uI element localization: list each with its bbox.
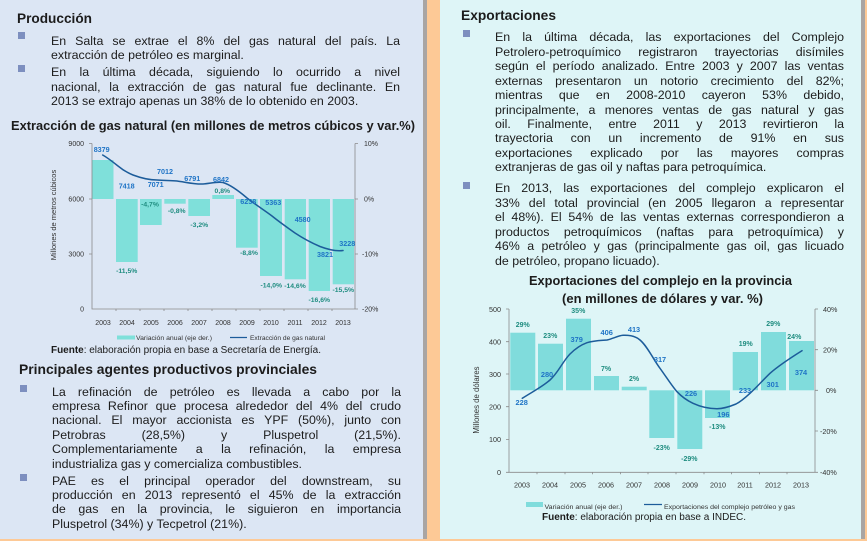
year labels: 2004 (119, 320, 135, 327)
heading: chart subtitle exports: (en millones de dólares y var. %) (562, 291, 763, 306)
value labels: 317 (654, 355, 666, 364)
percent labels: 35% (571, 308, 586, 315)
axes (506, 309, 818, 474)
text: PAE: Pluspetrol (34%) y Tecpetrol (21%). (52, 517, 247, 531)
right axis labels: -20% (820, 427, 837, 436)
year labels: 2013 (793, 480, 809, 490)
bullet icon (20, 385, 27, 392)
bars: annual variation (92, 160, 354, 291)
left axis labels: 300 (489, 370, 501, 379)
legend: Extracción de gas natural (250, 335, 325, 342)
text: exports decade: En la última década, las exportaciones del Complejo (495, 30, 844, 44)
text: exports decade: mientras que en 2008-2010 cayeron 53% debido, (495, 88, 844, 102)
legend: Variación anual (eje der.) (544, 504, 622, 511)
text: refining: Petrobras (28,5%) y Pluspetrol (21,5%). (52, 428, 401, 442)
panel: right edge shadow (861, 0, 865, 539)
text: last decade (51, 65, 400, 108)
value labels: 3228 (339, 239, 355, 248)
value labels: 228 (516, 398, 528, 407)
bullet icon (18, 65, 25, 72)
line: gas extraction (103, 155, 343, 251)
text: PAE: de gas en la provincia, le siguieron en importancia (52, 502, 401, 516)
legend: Variación anual (eje der.) (136, 335, 212, 342)
value labels (94, 145, 355, 259)
left axis labels: 3000 (68, 252, 84, 258)
text: exports decade: externas presentaron un notorio crecimiento del 82%; (495, 74, 844, 88)
year labels (514, 480, 809, 490)
percent labels: -13% (709, 424, 726, 431)
year labels: 2013 (335, 320, 351, 327)
axis title: Millones de metros cúbicos (49, 170, 58, 260)
text: exports 2013: 33% del total provincial (en 2005 llegaron a representar (495, 196, 844, 210)
heading: Principales agentes: Principales agentes productivos provinciales (19, 361, 317, 377)
percent labels: -23% (654, 445, 671, 452)
year labels: 2011 (737, 480, 753, 490)
left axis labels: 6000 (68, 196, 84, 204)
left axis labels: 500 (489, 305, 501, 314)
year labels: 2004 (542, 480, 558, 490)
heading: chart title exports: Exportaciones del complejo en la provincia (529, 273, 793, 288)
year labels: 2003 (514, 480, 530, 490)
value labels: 4580 (295, 215, 311, 224)
left axis labels: 400 (489, 338, 501, 346)
year labels: 2011 (287, 320, 303, 327)
text: exports decade: Petrolero-petroquímico registraron trayectorias disímiles (495, 45, 844, 59)
text: gas share: En Salta se extrae el 8% del gas natural del país. La (51, 34, 400, 48)
text: exports 2013 (495, 181, 844, 268)
value labels: 406 (601, 328, 613, 337)
right axis labels (820, 305, 838, 477)
text: exports 2013: el 48%). El 54% de las ventas externas correspondieron a (495, 210, 844, 224)
right axis labels: 0% (826, 386, 837, 395)
year labels (95, 320, 351, 327)
text: exports decade: según el período analizado. Entre 2003 y 2007 las ventas (495, 59, 844, 73)
right axis labels: 20% (823, 346, 838, 354)
right axis labels: -20% (362, 306, 378, 314)
year labels: 2009 (239, 320, 255, 327)
left axis labels: 200 (489, 402, 501, 412)
value labels: 301 (767, 380, 779, 389)
percent labels: -15,5% (333, 287, 354, 294)
percent labels (116, 188, 354, 304)
percent labels (516, 308, 802, 463)
source: exports chart: Fuente: elaboración propia en base a INDEC. (542, 512, 746, 523)
percent labels: -14,6% (284, 283, 306, 290)
year labels: 2008 (654, 480, 670, 490)
text: PAE (52, 474, 401, 531)
year labels: 2009 (682, 480, 698, 490)
text: refining: Complementariamente a la refinación, la empresa (52, 442, 401, 456)
panel: right background (440, 0, 861, 539)
left axis labels (489, 305, 501, 477)
heading: Exportaciones: Exportaciones (461, 7, 556, 23)
text: refining: empresa Refinor que procesa alrededor del 4% del crudo (52, 399, 401, 413)
bullet icon (463, 182, 470, 189)
text: exports decade: extranjeras de gas oil y naftas para petroquímica. (495, 160, 766, 174)
right axis labels: -10% (362, 252, 378, 258)
year labels: 2006 (167, 320, 183, 327)
year labels: 2007 (191, 320, 207, 327)
year labels: 2005 (143, 320, 159, 327)
value labels: 280 (541, 370, 553, 379)
line: exports (522, 335, 802, 409)
panel: divider shadow (423, 0, 427, 539)
bullet icon (463, 30, 470, 37)
text: last decade: nacional, la extracción de gas natural fue declinante. En (51, 80, 400, 94)
text: gas share (51, 34, 400, 62)
text: exports 2013: productos petroquímicos (naftas para petroquímica) y (495, 225, 844, 239)
text: exports decade: trayectoria con un incremento de 91% en sus (495, 131, 844, 145)
text: last decade: En la última década, siguiendo lo ocurrido a nivel (51, 65, 400, 79)
percent labels: -3,2% (190, 222, 208, 229)
chart: exports (472, 305, 838, 511)
right axis labels: 40% (823, 305, 838, 314)
panel: left background (0, 0, 423, 539)
text: refining: industrializa gas y comercializa combustibles. (52, 457, 302, 471)
year labels: 2012 (765, 480, 781, 490)
value labels: 196 (717, 410, 729, 419)
right axis labels: 0% (364, 196, 374, 204)
percent labels: -0,8% (168, 208, 186, 215)
value labels: 6791 (184, 174, 200, 183)
right axis labels (362, 141, 378, 314)
percent labels: 24% (787, 334, 802, 341)
value labels (516, 325, 808, 419)
value labels: 7012 (157, 167, 173, 176)
percent labels: 19% (739, 341, 753, 348)
text: exports decade: exportaciones explicado por las mayores compras (495, 146, 844, 160)
percent labels: 2% (629, 376, 640, 383)
percent labels: 29% (766, 321, 781, 328)
axes (89, 144, 358, 311)
text: PAE: producción en 2013 representó el 45% de la extracción (52, 488, 401, 502)
year labels: 2008 (215, 320, 231, 327)
text: exports decade (495, 30, 844, 174)
text: exports decade: oil. Finalmente, entre 2011 y 2013 revirtieron la (495, 117, 844, 131)
right axis labels: -40% (820, 468, 837, 477)
value labels: 6238 (240, 197, 256, 206)
year labels: 2006 (598, 480, 614, 490)
value labels: 5363 (265, 198, 281, 207)
left axis labels: 9000 (68, 141, 84, 148)
year labels: 2012 (311, 320, 327, 327)
text: exports decade: principalmente, a menores ventas de gas natural y gas (495, 103, 844, 117)
text: PAE: PAE es el principal operador del downstream, su (52, 474, 401, 488)
value labels: 413 (628, 325, 640, 334)
text: refining (52, 385, 401, 471)
source: gas chart: Fuente: elaboración propia en base a Secretaría de Energía. (51, 345, 321, 356)
value labels: 7418 (119, 182, 135, 190)
legend: Exportaciones del complejo petróleo y gas (664, 504, 795, 511)
value labels: 8379 (94, 145, 110, 154)
percent labels: -29% (681, 456, 698, 463)
text: exports 2013: de petróleo, propano licuado). (495, 254, 660, 268)
percent labels: 29% (516, 322, 530, 329)
left axis labels (68, 141, 84, 314)
year labels: 2003 (95, 320, 111, 327)
percent labels: -4,7% (141, 202, 159, 208)
legend (117, 335, 325, 342)
text: exports 2013: En 2013, las exportaciones del complejo explicaron el (495, 181, 844, 195)
heading: chart title gas: Extracción de gas natural (en millones de metros cúbicos y var.%) (11, 118, 415, 133)
value labels: 226 (685, 389, 697, 398)
value labels: 374 (795, 368, 808, 377)
left axis labels: 100 (489, 435, 501, 444)
percent labels: -11,5% (116, 268, 137, 275)
percent labels: 7% (601, 366, 612, 373)
bullet icon (18, 32, 25, 39)
percent labels: -14,0% (261, 282, 282, 290)
legend (526, 502, 795, 511)
right axis labels: 10% (364, 141, 378, 148)
year labels: 2010 (263, 320, 279, 327)
axis title: Millones de dólares (472, 366, 481, 434)
text: last decade: 2013 se extrajo apenas un 38% de lo obtenido en 2003. (51, 94, 358, 108)
value labels: 379 (571, 335, 583, 344)
text: gas share: extracción de petróleo es marginal. (51, 48, 244, 62)
bars: annual variation (510, 319, 814, 449)
text: exports 2013: 46% a petróleo y gas (principalmente gas oil, gas licuado (495, 239, 844, 253)
left axis labels: 0 (80, 306, 84, 314)
value labels: 7071 (148, 180, 164, 189)
year labels: 2005 (570, 480, 586, 490)
value labels: 233 (739, 386, 751, 395)
percent labels: 23% (543, 333, 558, 340)
value labels: 3821 (317, 250, 333, 259)
percent labels: -8,8% (240, 250, 258, 257)
text: refining: nacional. El mayor accionista es YPF (50%), junto con (52, 413, 401, 427)
bullet icon (20, 474, 27, 481)
text: refining: La refinación de petróleo es llevada a cabo por la (52, 385, 401, 399)
left axis labels: 0 (497, 468, 501, 477)
year labels: 2010 (710, 480, 726, 490)
year labels: 2007 (626, 480, 642, 490)
value labels: 6842 (213, 175, 229, 184)
percent labels: 0,8% (215, 188, 230, 195)
chart: gas extraction (49, 141, 378, 342)
percent labels: -16,6% (309, 297, 330, 304)
heading: Producción: Producción (17, 11, 92, 26)
